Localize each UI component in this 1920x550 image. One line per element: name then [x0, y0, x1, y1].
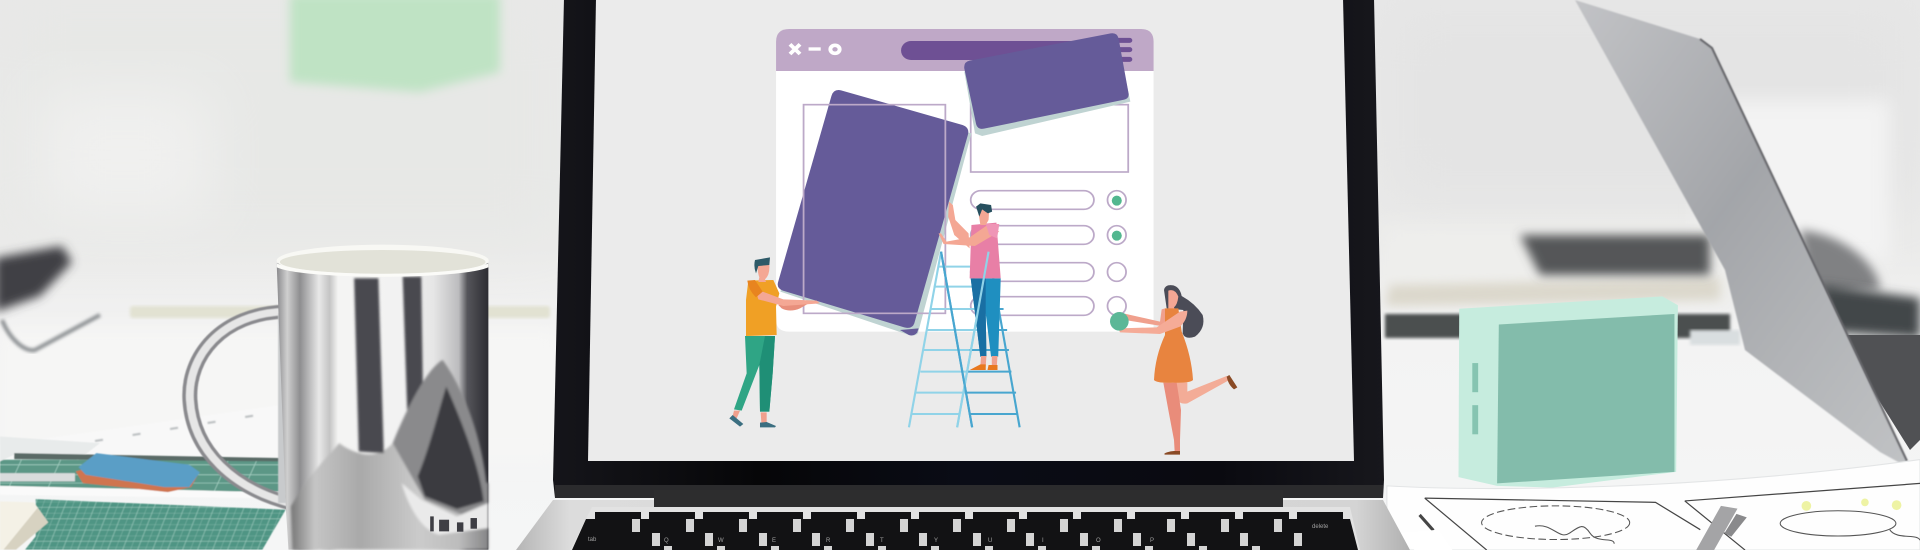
shoes	[1227, 375, 1237, 389]
key legends: Y	[934, 538, 938, 544]
key legends: delete	[1312, 524, 1329, 530]
legs	[734, 336, 775, 412]
cutting mat, eraser and notebook	[0, 436, 286, 550]
left image placeholder	[804, 105, 945, 313]
hinge strip	[654, 490, 1283, 507]
blurred items left of the mug	[0, 246, 550, 470]
head and hair	[978, 208, 989, 225]
man on the ladder	[939, 202, 1001, 427]
blurred book and dark objects on the right	[1382, 225, 1920, 450]
hamburger menu	[1118, 40, 1130, 59]
silver pen	[1696, 506, 1737, 550]
mug rim and inside	[277, 245, 489, 277]
ladder front crossing	[957, 252, 989, 427]
dark streak reflections	[354, 278, 384, 453]
speaker front grille	[1497, 314, 1674, 483]
laptop screen bezel	[553, 0, 1384, 498]
browser title bar	[776, 29, 1154, 71]
lower reflection of mug	[291, 443, 488, 550]
hair	[1164, 285, 1203, 338]
key legends: R	[826, 538, 831, 544]
number row gaps	[632, 519, 1282, 532]
eraser	[76, 463, 198, 492]
front cutting mat with grid	[25, 499, 286, 550]
key legends: E	[772, 538, 776, 544]
laptop screen	[588, 0, 1354, 461]
web layout illustration	[776, 29, 1154, 427]
key legends: T	[880, 538, 884, 544]
shoes	[970, 364, 986, 370]
torso	[746, 280, 779, 336]
front arm	[1118, 311, 1187, 334]
back cutting mat strip	[0, 460, 286, 491]
key legends: P	[1150, 538, 1154, 544]
bottom row gaps	[664, 546, 1260, 550]
tower reflection	[393, 360, 488, 520]
front arm	[939, 225, 999, 246]
small card shadow	[964, 42, 1130, 136]
raised arm	[948, 202, 970, 248]
small purple card	[964, 33, 1129, 129]
back arm	[1123, 308, 1165, 327]
shoes	[729, 415, 743, 427]
letter row gaps	[652, 533, 1302, 546]
main laptop	[516, 0, 1410, 550]
wireframe sketch lines	[1420, 483, 1920, 550]
mug handle	[190, 312, 302, 505]
raised leg	[1173, 376, 1229, 404]
ankles	[733, 411, 767, 423]
standing leg	[1163, 383, 1181, 452]
radio buttons	[1107, 191, 1126, 315]
key legends: I	[1042, 538, 1044, 544]
white notebook corner	[0, 501, 48, 550]
key legends: W	[718, 538, 724, 544]
green ball	[1110, 312, 1129, 331]
mug body	[277, 263, 488, 550]
keyboard	[570, 507, 1360, 550]
ladder back rails and rungs	[909, 252, 1020, 427]
large purple card	[778, 90, 968, 328]
upper arm	[757, 292, 820, 306]
second laptop lid seen from behind	[1575, 0, 1907, 463]
key legends: tab	[588, 537, 597, 543]
head and hair	[758, 265, 769, 282]
chrome mug	[190, 245, 489, 550]
sleeve	[747, 280, 763, 297]
face and neck	[1168, 290, 1178, 310]
torso	[970, 223, 1001, 278]
large card shadow	[780, 100, 971, 336]
man holding the large card	[729, 257, 820, 427]
mint green speaker	[1459, 296, 1678, 488]
dress	[1154, 308, 1193, 383]
laptop base	[516, 500, 1410, 550]
key legends: U	[988, 538, 992, 544]
function key row	[595, 512, 1343, 519]
key legends	[588, 524, 1329, 544]
browser window body	[776, 71, 1154, 332]
list pills	[971, 191, 1094, 315]
window controls	[790, 44, 840, 54]
legs	[971, 278, 1001, 357]
sketch papers and pen at bottom right	[1387, 460, 1920, 550]
right image placeholder	[971, 105, 1128, 172]
blurred green box behind the laptop	[290, 0, 500, 92]
speaker buttons	[1472, 363, 1478, 434]
sketched bulb doodles	[1482, 506, 1920, 544]
key legends: Q	[664, 538, 669, 544]
lower arm	[778, 300, 812, 310]
woman holding the green ball	[1110, 285, 1237, 455]
key legends: O	[1096, 538, 1101, 544]
address bar	[901, 41, 1101, 60]
